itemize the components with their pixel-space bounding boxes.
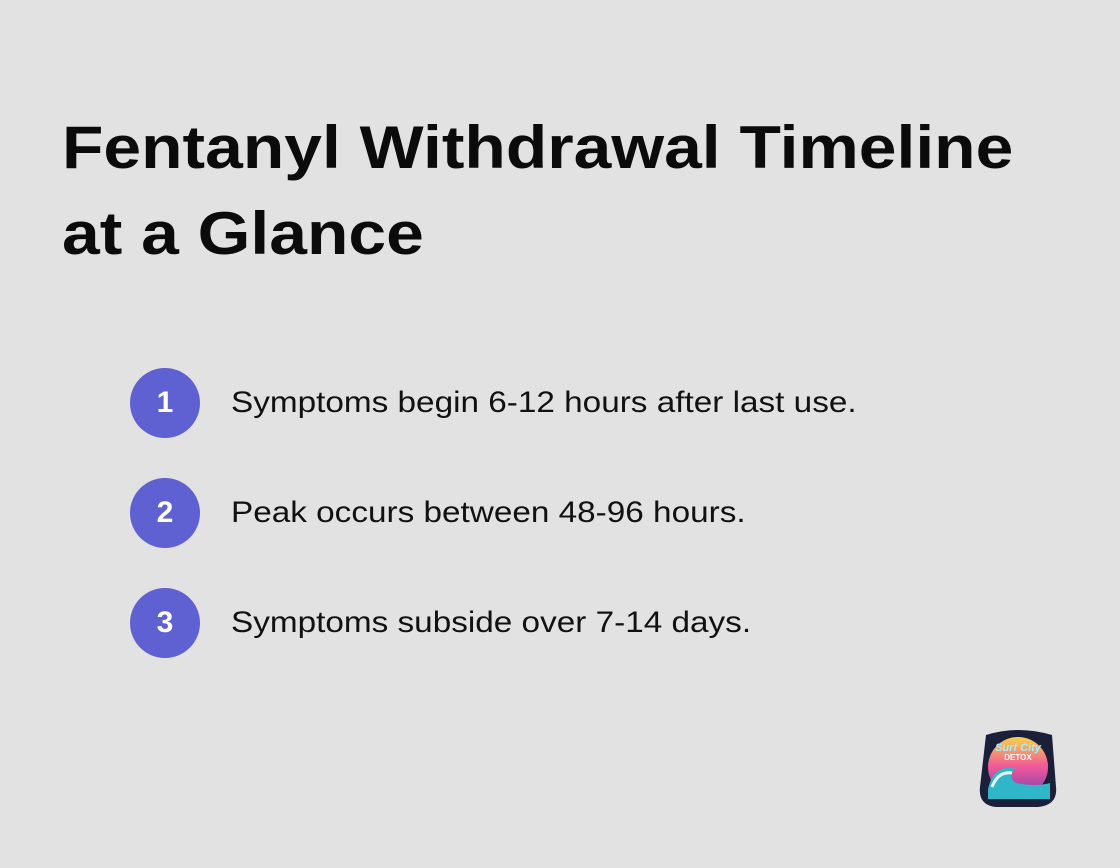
title: at a Glance xyxy=(62,200,424,267)
badge 1: 1 xyxy=(157,386,173,419)
logo: surf city detox: Surf City xyxy=(995,742,1042,754)
step 3 text: Symptoms subside over 7-14 days. xyxy=(231,606,751,639)
step 2 text: Peak occurs between 48-96 hours. xyxy=(231,496,746,529)
badge 1 xyxy=(130,368,200,438)
badge 3 xyxy=(130,588,200,658)
step 3 xyxy=(130,588,751,658)
title xyxy=(62,114,1013,267)
step 1 xyxy=(130,368,857,438)
badge 2 xyxy=(130,478,200,548)
logo: surf city detox: DETOX xyxy=(1004,753,1032,762)
step 1 text: Symptoms begin 6-12 hours after last use. xyxy=(231,386,857,419)
badge 2: 2 xyxy=(157,496,173,529)
logo: surf city detox xyxy=(980,730,1056,807)
step 2 xyxy=(130,478,746,548)
badge 3: 3 xyxy=(157,606,173,639)
title: Fentanyl Withdrawal Timeline xyxy=(62,114,1013,181)
